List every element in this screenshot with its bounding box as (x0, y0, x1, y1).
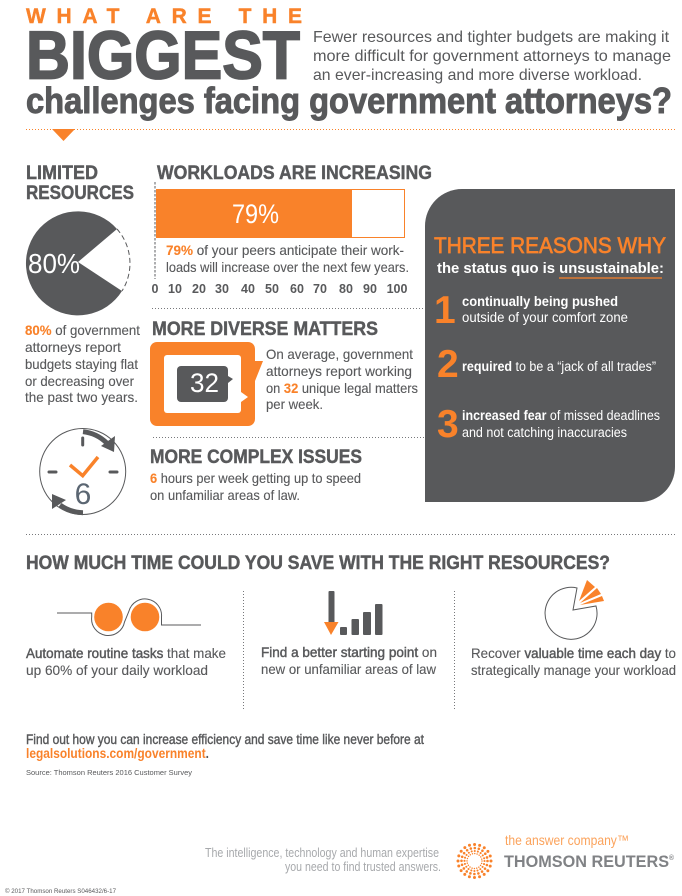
reason 1: outside of your comfort zone (462, 310, 628, 325)
reason 2 (437, 343, 656, 386)
logo tagline: the answer company™ (505, 832, 629, 848)
heading: three reasons why: THREE REASONS WHY (434, 233, 666, 258)
tagline: you need to find trusted answers. (285, 860, 441, 874)
bar chart axis labels: 0 (152, 282, 159, 296)
text: matters statistic: per week. (266, 396, 323, 412)
text: workloads statistic: 79% of your peers anticipate their work- (166, 242, 404, 258)
text: matters statistic (266, 346, 418, 412)
reason 1: 1 (434, 289, 456, 332)
text: budgets statistic: attorneys report (25, 339, 121, 355)
text: matters statistic: attorneys report working (266, 363, 412, 379)
text: recover time: Recover valuable time each day to (471, 645, 676, 661)
panel: limited resources (25, 162, 140, 405)
intro text: more difficult for government attorneys to manage (313, 48, 671, 65)
bar chart axis labels: 100 (387, 282, 407, 296)
reason 3: increased fear of missed deadlines (462, 408, 660, 423)
text: recover time (471, 645, 676, 678)
logo: thomson reuters (458, 832, 675, 878)
reason 1 (434, 289, 628, 332)
bar chart axis labels: 40 (241, 282, 255, 296)
heading: workloads: WORKLOADS ARE INCREASING (157, 162, 432, 184)
icon: dot sphere (458, 844, 491, 878)
text: budgets statistic: or decreasing over (25, 373, 134, 389)
title line: what are the: WHAT ARE THE (26, 5, 302, 28)
heading: limited resources (26, 162, 134, 204)
pie chart: 80%: 80% (28, 248, 80, 279)
text: budgets statistic: 80% of government (25, 322, 140, 338)
bar chart axis labels: 30 (215, 282, 229, 296)
bar chart axis labels (152, 282, 407, 296)
icon: pie with orange rays (545, 580, 604, 639)
bar chart axis labels: 20 (192, 282, 206, 296)
text: budgets statistic: the past two years. (25, 389, 138, 405)
icon: header pointer triangle (52, 129, 75, 141)
text: workloads statistic: loads will increase over the next few years. (166, 259, 409, 275)
pie chart: 80% (26, 211, 130, 315)
logo wordmark: THOMSON REUTERS (504, 852, 677, 871)
reason 2: 2 (437, 343, 459, 386)
text: matters statistic: on 32 unique legal matters (266, 380, 418, 396)
bar chart axis labels: 50 (265, 282, 279, 296)
bar chart axis labels: 60 (290, 282, 304, 296)
reason 1: continually being pushed (462, 294, 618, 309)
text: starting point (261, 644, 437, 677)
icon: speech bubble with 32 (150, 342, 263, 426)
bar chart axis labels: 80 (339, 282, 353, 296)
icon: gears on a line (57, 599, 201, 636)
panel: workloads are increasing (152, 162, 432, 296)
panel: recover time (471, 580, 676, 678)
intro text: an ever-increasing and more diverse workload. (313, 67, 642, 84)
panel: automate (26, 599, 226, 678)
text: starting point: Find a better starting point on (261, 644, 437, 660)
reason 3: and not catching inaccuracies (462, 425, 627, 440)
call to action (26, 732, 424, 761)
tagline: The intelligence, technology and human expertise (205, 846, 439, 860)
text: automate (26, 645, 226, 678)
panel: three reasons why (425, 189, 675, 502)
call to action: legalsolutions.com/government. (26, 746, 209, 761)
intro text (313, 29, 671, 84)
icon: arrow and bars (324, 591, 382, 635)
copyright: © 2017 Thomson Reuters S046432/6-17 (5, 888, 117, 895)
text: starting point: new or unfamiliar areas of law (261, 661, 437, 677)
text: complex issues statistic: on unfamiliar areas of law. (150, 487, 300, 503)
icon: speech bubble with 32: 32 (190, 368, 219, 398)
heading: more diverse matters: MORE DIVERSE MATTERS (152, 318, 378, 340)
text: matters statistic: On average, government (266, 346, 413, 362)
bar chart: 79%: 79% (232, 199, 279, 229)
tagline (205, 846, 441, 874)
logo wordmark: ® (669, 854, 675, 862)
text: automate: Automate routine tasks that make (26, 645, 226, 661)
intro text: Fewer resources and tighter budgets are making it (313, 29, 670, 46)
heading: more complex issues: MORE COMPLEX ISSUES (150, 446, 362, 468)
call to action: Find out how you can increase efficiency and save time like never before at (26, 732, 424, 747)
source note: Source: Thomson Reuters 2016 Customer Survey (26, 768, 192, 777)
text: automate: up 60% of your daily workload (26, 662, 208, 678)
title (26, 5, 672, 121)
icon: clock with 6 (40, 428, 126, 514)
subheading: status quo: the status quo is unsustainable: (437, 260, 664, 277)
text: complex issues statistic (150, 470, 361, 503)
bar chart axis labels: 10 (168, 282, 182, 296)
panel: starting point (261, 591, 437, 677)
bar chart axis labels: 90 (363, 282, 377, 296)
panel: more complex issues (150, 446, 362, 503)
heading: limited resources: LIMITED (26, 162, 98, 184)
text: budgets statistic: budgets staying flat (25, 356, 138, 372)
reason 2: required to be a “jack of all trades” (462, 359, 656, 374)
title line: biggest: BIGGEST (26, 18, 300, 94)
bar chart: 79% (156, 189, 404, 238)
heading: how much time: HOW MUCH TIME COULD YOU SAVE WITH THE RIGHT RESOURCES? (26, 553, 610, 574)
reason 3 (437, 403, 660, 446)
panel: more diverse matters (150, 318, 418, 426)
icon: clock with 6: 6 (75, 478, 91, 511)
text: complex issues statistic: 6 hours per week getting up to speed (150, 470, 361, 486)
reason 3: 3 (437, 403, 459, 446)
bar chart axis labels: 70 (313, 282, 327, 296)
heading: limited resources: RESOURCES (26, 182, 134, 204)
text: workloads statistic (166, 242, 409, 275)
text: budgets statistic (25, 322, 140, 405)
